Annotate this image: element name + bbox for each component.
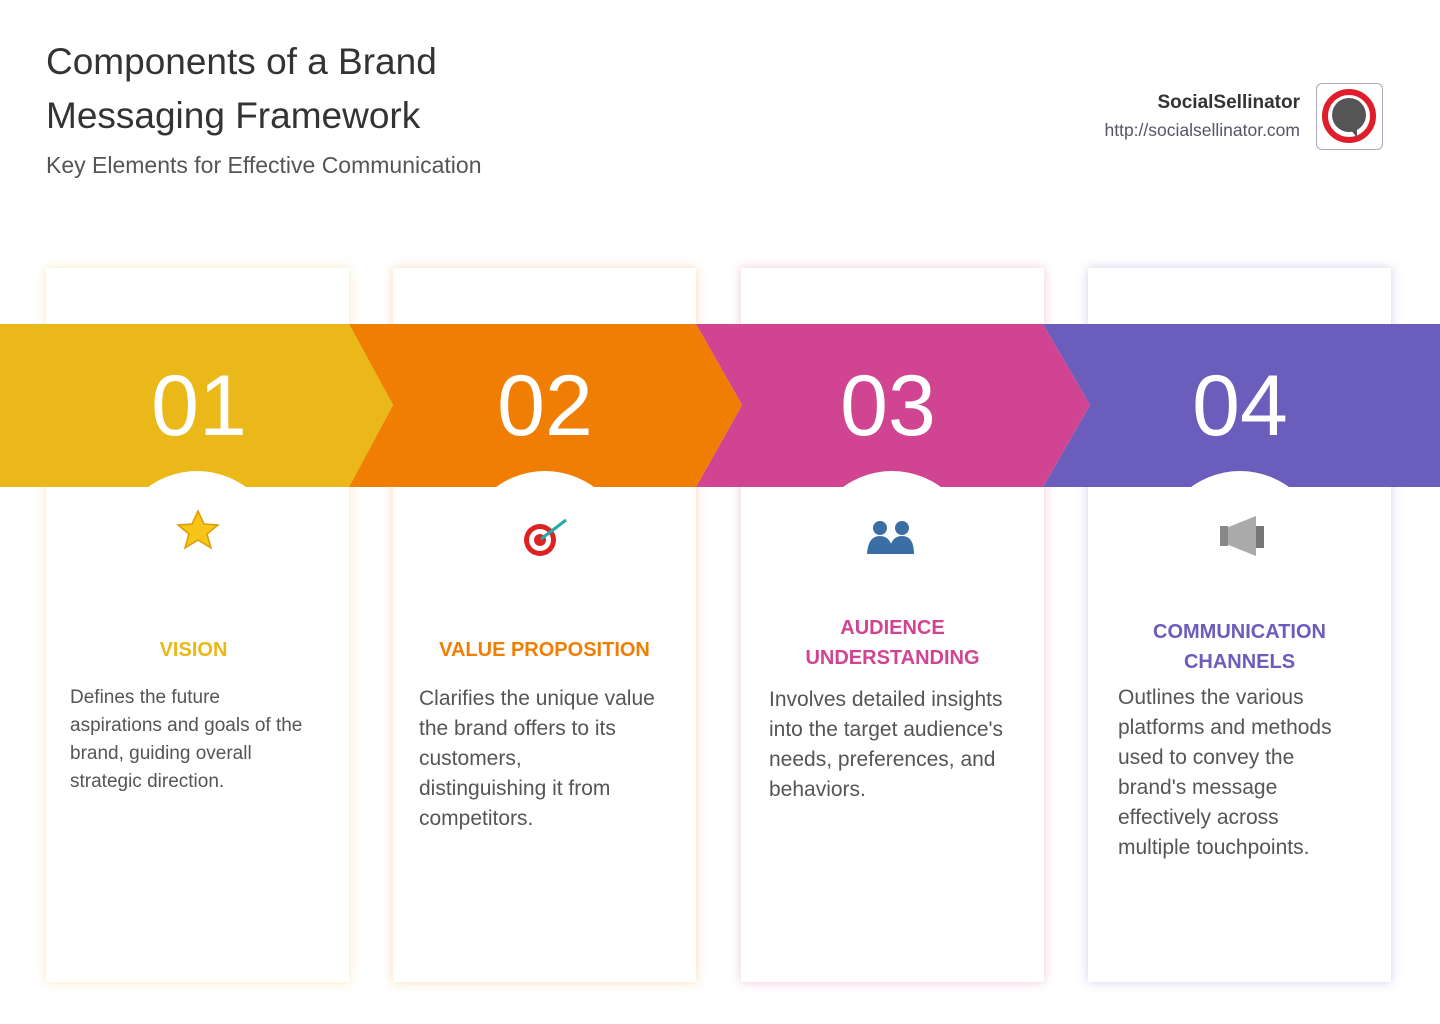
card 3 text: AUDIENCE <box>840 617 945 639</box>
card 4 text: brand's message <box>1118 776 1277 799</box>
card 2 text: the brand offers to its <box>419 717 616 740</box>
card 3 text: Involves detailed insights <box>769 688 1002 711</box>
arrow band: 01 <box>151 358 247 454</box>
card 3 shadow <box>741 268 1044 982</box>
arrow band: 04 <box>1192 358 1288 454</box>
card 3 text: into the target audience's <box>769 718 1003 741</box>
card 4 text: CHANNELS <box>1184 651 1295 673</box>
subtitle: Key Elements for Effective Communication <box>46 152 481 178</box>
card 1 text: aspirations and goals of the <box>70 715 302 736</box>
text: competitors. <box>419 807 533 830</box>
card 1 text: brand, guiding overall <box>70 743 252 764</box>
card 2 text: customers, <box>419 747 522 770</box>
text: strategic direction. <box>70 771 224 792</box>
card 4 text: COMMUNICATION <box>1153 621 1326 643</box>
card 2 text <box>419 639 655 830</box>
card 1 text <box>70 639 302 792</box>
card 3 text: behaviors. <box>769 778 866 801</box>
card 4 text: used to convey the <box>1118 746 1294 769</box>
icon star <box>178 511 218 548</box>
card 4 text: Outlines the various <box>1118 686 1304 709</box>
title: Messaging Framework <box>46 95 420 136</box>
title <box>46 41 437 136</box>
card 2 text: VALUE PROPOSITION <box>439 639 650 661</box>
icon megaphone <box>1220 516 1264 556</box>
card 1 text: VISION <box>160 639 227 661</box>
icon target <box>524 520 566 556</box>
card 4 text: multiple touchpoints. <box>1118 836 1309 859</box>
card 3 text <box>769 617 1003 801</box>
arrow band: 03 <box>840 358 936 454</box>
card 2 text: distinguishing it from <box>419 777 610 800</box>
brand block: SocialSellinator <box>1157 92 1300 113</box>
title: Components of a Brand <box>46 41 437 82</box>
card 4 text: platforms and methods <box>1118 716 1332 739</box>
arrow band: 02 <box>497 358 593 454</box>
icon people <box>867 521 914 554</box>
brand block <box>1104 92 1300 140</box>
logo <box>1316 83 1383 150</box>
card 4 text <box>1118 621 1332 859</box>
brand block: http://socialsellinator.com <box>1104 120 1300 140</box>
card 4 shadow <box>1088 268 1391 982</box>
card 2 shadow <box>393 268 696 982</box>
card 3 text: needs, preferences, and <box>769 748 996 771</box>
card 2 text: Clarifies the unique value <box>419 687 655 710</box>
card 1 shadow <box>46 268 349 982</box>
card 3 text: UNDERSTANDING <box>805 647 980 669</box>
card 1 text: Defines the future <box>70 687 220 708</box>
card 4 text: effectively across <box>1118 806 1279 829</box>
